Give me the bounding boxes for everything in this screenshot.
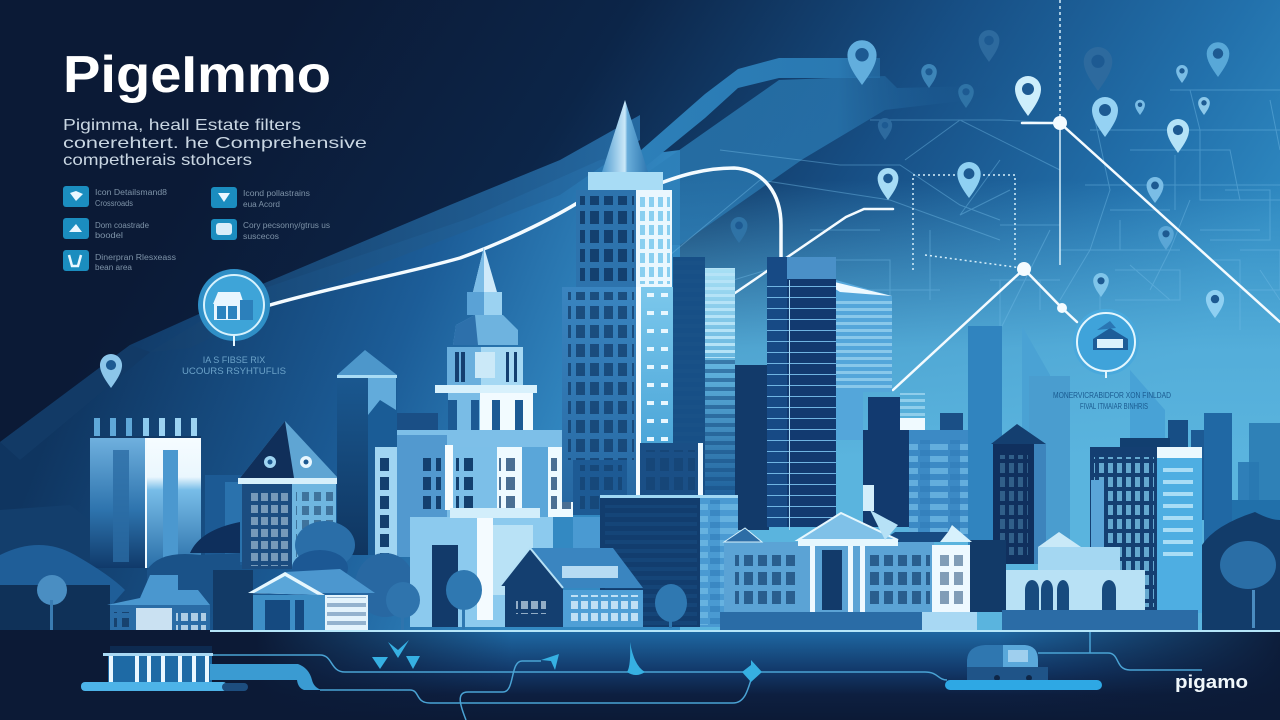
callout caption right bbox=[1053, 391, 1171, 411]
right classical building bbox=[1002, 480, 1198, 630]
intro paragraph: conerehtert. he Comprehensive bbox=[63, 135, 367, 152]
feature text 5 bbox=[95, 253, 176, 272]
feature text 4: Cory pecsonny/gtrus us bbox=[243, 221, 330, 230]
ground strip bbox=[0, 630, 1280, 720]
feature text 2: Icond pollastrains bbox=[243, 189, 310, 198]
garage house bbox=[213, 569, 375, 630]
white low building bbox=[410, 508, 553, 627]
guide lines bbox=[913, 0, 1060, 270]
tower spire and cap bbox=[453, 247, 518, 345]
delivery van bbox=[945, 645, 1102, 690]
title: PigeImmo bbox=[63, 46, 331, 104]
cottage with gables bbox=[500, 548, 643, 627]
ribbons toward map bbox=[640, 58, 1056, 245]
network nodes bbox=[1017, 116, 1067, 313]
callout: house pin bbox=[198, 269, 270, 346]
right tree mound bbox=[1202, 512, 1280, 630]
map street lines bbox=[640, 90, 1280, 330]
dome tower bbox=[337, 350, 397, 555]
feature text 1 bbox=[95, 188, 168, 208]
dark gabled tower bbox=[991, 424, 1046, 564]
callout caption left: UCOURS RSYHTUFLIS bbox=[182, 366, 286, 376]
right rear block of main tower bbox=[640, 443, 703, 495]
feature text 3 bbox=[95, 221, 150, 240]
feature text 5: bean area bbox=[95, 263, 133, 272]
feature icon 2 bbox=[211, 187, 237, 208]
hexagonal roof house bbox=[238, 421, 338, 569]
feature icon 3 bbox=[63, 218, 89, 239]
left apartment block bbox=[90, 418, 201, 568]
feature text 5: Dinerpran Rlesxeass bbox=[95, 253, 176, 262]
callout: building pin bbox=[1073, 309, 1139, 378]
feature text 2: eua Acord bbox=[243, 200, 280, 209]
feature text 2 bbox=[243, 189, 310, 209]
route lines bbox=[212, 632, 1202, 720]
callout caption left: IA S FIBSE RIX bbox=[203, 355, 265, 365]
feature icon 5 bbox=[63, 250, 89, 271]
location pins bbox=[100, 30, 1229, 388]
feature text 3: Dom coastrade bbox=[95, 221, 150, 230]
right dark office and cyan tower bbox=[1090, 447, 1202, 613]
left tree mounds bbox=[0, 521, 415, 630]
intro paragraph: Pigimma, heall Estate filters bbox=[63, 117, 301, 134]
feature text 1: Icon Detailsmand8 bbox=[95, 188, 168, 197]
feature text 4: suscecos bbox=[243, 232, 279, 241]
bottom pier building bbox=[81, 646, 322, 691]
feature text 4 bbox=[243, 221, 330, 241]
white trend line network bbox=[270, 123, 1280, 390]
logo: pigamo bbox=[1175, 672, 1248, 692]
main skyscraper bbox=[562, 100, 682, 515]
striped companion tower bbox=[673, 257, 769, 530]
street trees bbox=[37, 570, 687, 630]
feature text 1: Crossroads bbox=[95, 199, 133, 208]
diagonal city hill band bbox=[0, 115, 680, 640]
intro paragraph: competherais stohcers bbox=[63, 152, 252, 169]
midrise blue block bbox=[863, 393, 968, 540]
central front dark block bbox=[573, 495, 738, 627]
callout caption right: FIVAL ITMAIAR BINHRIS bbox=[1080, 402, 1148, 411]
callout caption right: MONERVICRABIDFOR XON FINLDAD bbox=[1053, 391, 1171, 400]
callout caption left bbox=[182, 355, 286, 376]
dark glass tower bbox=[767, 257, 892, 530]
foreground small house bbox=[107, 575, 210, 647]
feature icon 1 bbox=[63, 186, 89, 207]
intro paragraph bbox=[63, 117, 367, 169]
far skyline towers bbox=[0, 326, 1280, 640]
route arrow markers bbox=[372, 640, 762, 682]
classic central tower bbox=[375, 247, 573, 562]
feature list bbox=[63, 186, 330, 272]
feature icon 4 bbox=[211, 219, 237, 240]
classical columned building bbox=[720, 485, 1006, 630]
feature text 3: boodel bbox=[95, 231, 123, 240]
